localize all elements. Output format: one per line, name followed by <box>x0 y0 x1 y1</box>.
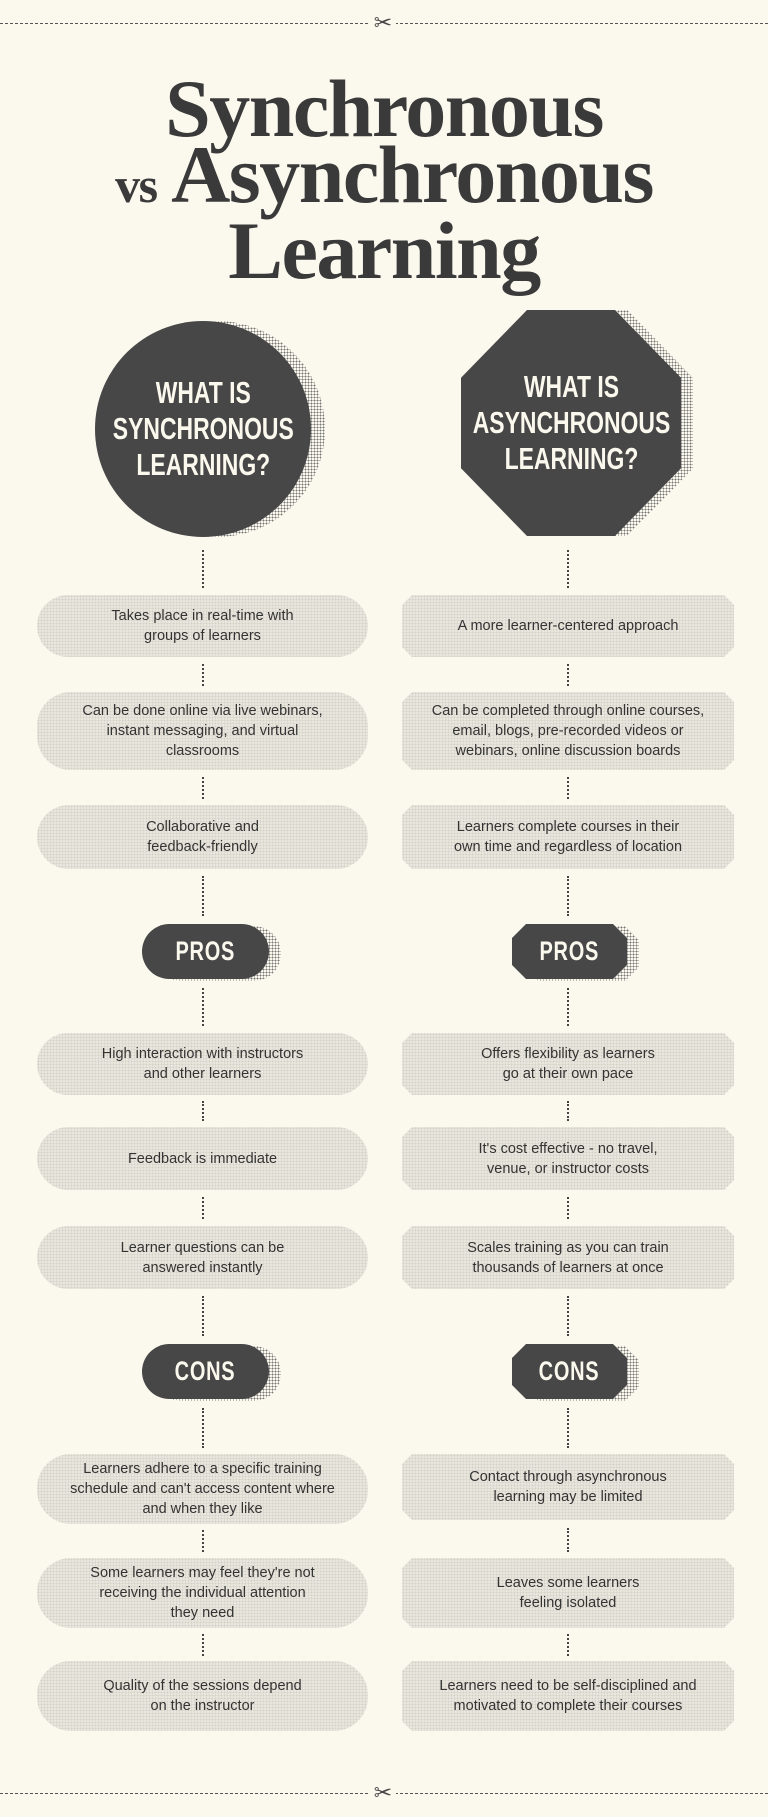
icon: scissors top <box>370 10 396 36</box>
right item 3: Learners complete courses in their <box>457 819 679 835</box>
right con 1: learning may be limited <box>493 1489 643 1505</box>
right con 3: motivated to complete their courses <box>454 1698 682 1714</box>
heading: what is asynchronous: ASYNCHRONOUS <box>472 405 670 440</box>
right con 2: feeling isolated <box>520 1595 616 1611</box>
tag: cons left: CONS <box>175 1356 236 1386</box>
left con 2: they need <box>171 1605 234 1621</box>
left item 2: instant messaging, and virtual <box>107 723 298 739</box>
left con 2: Some learners may feel they're not <box>90 1565 315 1581</box>
heading: what is synchronous: WHAT IS <box>155 375 251 410</box>
right item 2: Can be completed through online courses, <box>432 703 704 719</box>
left pro 3: Learner questions can be <box>121 1240 284 1256</box>
icon: scissors bottom: ✂ <box>374 1780 392 1805</box>
tag: cons right: CONS <box>539 1356 600 1386</box>
icon: scissors top: ✂ <box>374 10 392 35</box>
left con 1: schedule and can't access content where <box>70 1481 335 1497</box>
right item 3 <box>402 805 734 869</box>
left item 2: classrooms <box>166 743 239 759</box>
right item 2 <box>402 692 734 770</box>
left con 2: receiving the individual attention <box>99 1585 306 1601</box>
left con 3: Quality of the sessions depend <box>103 1678 302 1694</box>
right pro 1: Offers flexibility as learners <box>481 1046 655 1062</box>
left pro 1: and other learners <box>144 1066 261 1082</box>
tag: pros left <box>142 924 281 981</box>
right pro 1 <box>402 1033 734 1095</box>
left item 1: groups of learners <box>144 628 261 644</box>
right pro 3 <box>402 1226 734 1289</box>
left item 2 <box>37 692 368 770</box>
left con 2 <box>37 1558 368 1628</box>
right pro 3: thousands of learners at once <box>472 1260 664 1276</box>
left item 3: Collaborative and <box>146 819 259 835</box>
right con 1: Contact through asynchronous <box>469 1469 667 1485</box>
left item 3 <box>37 805 368 869</box>
tag: cons left <box>142 1344 281 1401</box>
tag: pros right <box>512 924 639 981</box>
left con 3 <box>37 1661 368 1731</box>
heading: what is asynchronous: LEARNING? <box>504 441 638 476</box>
right pro 2: venue, or instructor costs <box>487 1160 649 1176</box>
right item 2: email, blogs, pre-recorded videos or <box>452 723 684 739</box>
top dashed line <box>0 23 768 24</box>
left con 1: and when they like <box>142 1501 263 1517</box>
right item 2: webinars, online discussion boards <box>456 743 680 759</box>
right con 2 <box>402 1558 734 1628</box>
tag: pros right: PROS <box>540 936 599 966</box>
heading: what is synchronous <box>95 321 324 537</box>
title <box>115 63 653 296</box>
title: vs Asynchronous <box>115 129 653 220</box>
right item 1 <box>402 595 734 657</box>
title: Synchronous <box>165 63 603 154</box>
right pro 3: Scales training as you can train <box>467 1240 669 1256</box>
left item 3: feedback-friendly <box>147 839 258 855</box>
left con 1: Learners adhere to a specific training <box>83 1461 322 1477</box>
left pro 1 <box>37 1033 368 1095</box>
heading: what is asynchronous: WHAT IS <box>523 369 619 404</box>
right con 1 <box>402 1454 734 1520</box>
left pro 3 <box>37 1226 368 1289</box>
right con 3: Learners need to be self-disciplined and <box>439 1678 697 1694</box>
right pro 1: go at their own pace <box>503 1066 633 1082</box>
left item 1 <box>37 595 368 657</box>
left con 1 <box>37 1454 368 1524</box>
right pro 2 <box>402 1127 734 1190</box>
left pro 3: answered instantly <box>142 1260 263 1276</box>
left con 3: on the instructor <box>150 1698 254 1714</box>
right item 1: A more learner-centered approach <box>458 618 678 634</box>
right pro 2: It's cost effective - no travel, <box>478 1140 658 1156</box>
left pro 2: Feedback is immediate <box>128 1150 277 1166</box>
right item 3: own time and regardless of location <box>454 839 682 855</box>
tag: cons right <box>512 1344 639 1401</box>
tag: pros left: PROS <box>176 936 235 966</box>
heading: what is synchronous: LEARNING? <box>136 447 270 482</box>
title: Learning <box>228 205 540 296</box>
left pro 2 <box>37 1127 368 1190</box>
heading: what is asynchronous <box>461 310 693 536</box>
left item 2: Can be done online via live webinars, <box>82 703 323 719</box>
icon: scissors bottom <box>370 1780 396 1806</box>
heading: what is synchronous: SYNCHRONOUS <box>113 411 293 446</box>
bottom dashed line <box>0 1793 768 1794</box>
left item 1: Takes place in real-time with <box>111 608 294 624</box>
right con 3 <box>402 1661 734 1731</box>
right con 2: Leaves some learners <box>497 1575 639 1591</box>
left pro 1: High interaction with instructors <box>102 1046 303 1062</box>
